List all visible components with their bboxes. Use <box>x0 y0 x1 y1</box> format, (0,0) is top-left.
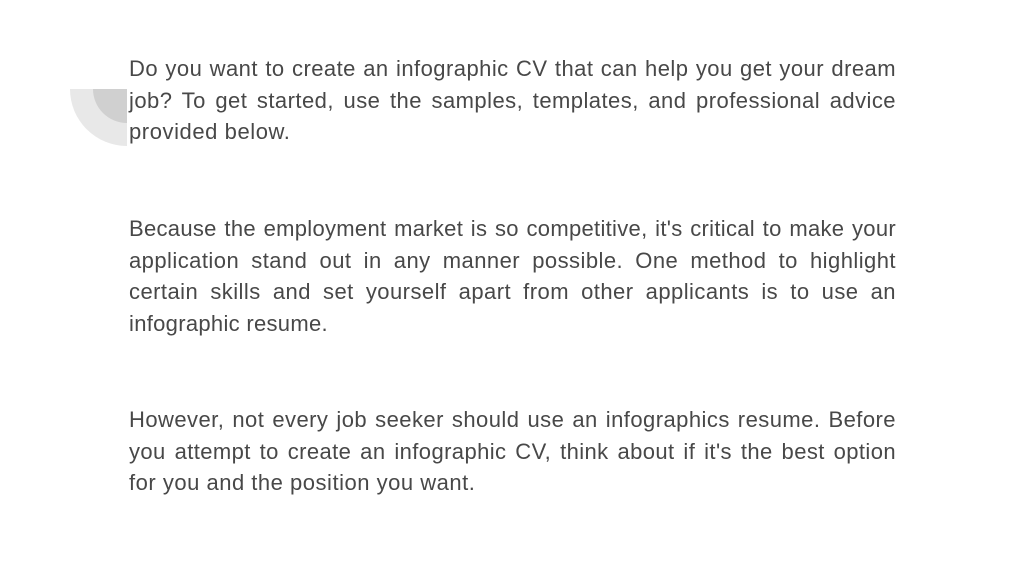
paragraph 2: Because the employment market is so competitive, it's critical to make your <box>129 216 896 241</box>
paragraph 2: application stand out in any manner possible. One method to highlight <box>129 248 896 273</box>
paragraph 1: Do you want to create an infographic CV that can help you get your dream <box>129 56 896 81</box>
paragraph 2 <box>129 216 896 336</box>
paragraph 1 <box>128 56 896 144</box>
paragraph 3: you attempt to create an infographic CV, think about if it's the best option <box>129 439 896 464</box>
paragraph 1: job? To get started, use the samples, templates, and professional advice <box>129 88 896 113</box>
paragraph 2: infographic resume. <box>129 311 328 336</box>
paragraph 2: certain skills and set yourself apart from other applicants is to use an <box>129 279 896 304</box>
paragraph 3: However, not every job seeker should use an infographics resume. Before <box>129 407 896 432</box>
decorative quarter-circle icon <box>70 89 127 146</box>
paragraph 3: for you and the position you want. <box>129 470 475 495</box>
paragraph 1: provided below. <box>129 119 290 144</box>
